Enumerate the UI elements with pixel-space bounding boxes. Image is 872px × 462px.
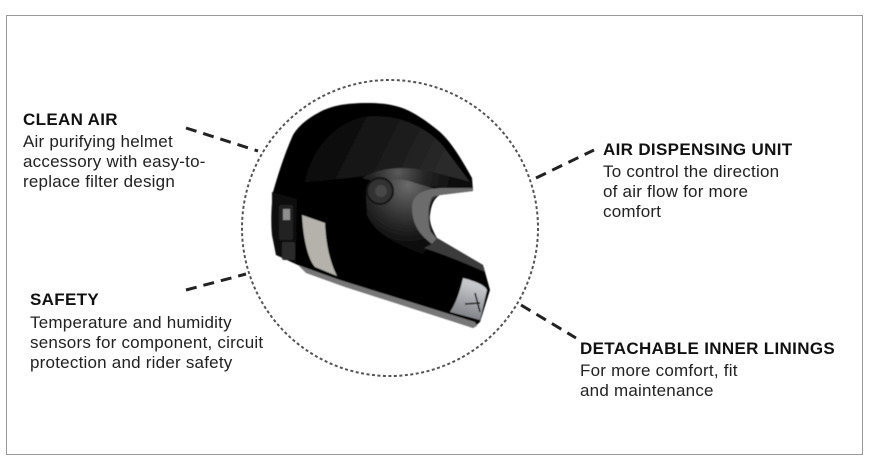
text block: air dispensing unit: of air flow for more (603, 182, 748, 201)
text block: safety: sensors for component, circuit (30, 333, 263, 352)
silver rear panel (302, 215, 337, 276)
leader line: detachable inner linings (521, 305, 576, 338)
leader line: safety (186, 274, 246, 290)
text block: safety (30, 290, 263, 372)
text block: safety: protection and rider safety (30, 353, 232, 372)
text block: detachable inner linings: DETACHABLE INNER LININGS (580, 339, 835, 358)
text block: clean air: CLEAN AIR (23, 110, 118, 129)
text block: safety: SAFETY (30, 290, 99, 309)
text block: air dispensing unit: To control the direction (603, 162, 779, 181)
rear button (283, 209, 290, 220)
text block: detachable inner linings: and maintenance (580, 381, 714, 400)
text block: air dispensing unit: comfort (603, 202, 661, 221)
side cheek panel (366, 179, 440, 254)
text block: air dispensing unit: AIR DISPENSING UNIT (603, 140, 793, 159)
visor trim (412, 188, 473, 244)
helmet shell (271, 103, 490, 328)
crown highlight (362, 168, 472, 189)
leader line: clean air (186, 128, 258, 151)
visor lower edge (424, 238, 485, 272)
text block: clean air: accessory with easy-to- (23, 152, 206, 171)
text block: detachable inner linings: For more comfort, fit (580, 361, 738, 380)
crown panel (305, 116, 470, 182)
visor pivot (367, 178, 393, 204)
helmet (271, 103, 490, 328)
leader line: air dispensing unit (536, 150, 594, 178)
text block: safety: Temperature and humidity (30, 313, 232, 332)
text block: air dispensing unit (603, 140, 793, 221)
text block: detachable inner linings (580, 339, 835, 400)
lower rim (298, 265, 477, 328)
dotted circle (242, 80, 538, 376)
rear module (272, 192, 297, 262)
text block: clean air: replace filter design (23, 172, 175, 191)
chin reflection (450, 278, 487, 320)
text block: clean air: Air purifying helmet (23, 132, 173, 151)
text block: clean air (23, 110, 206, 191)
